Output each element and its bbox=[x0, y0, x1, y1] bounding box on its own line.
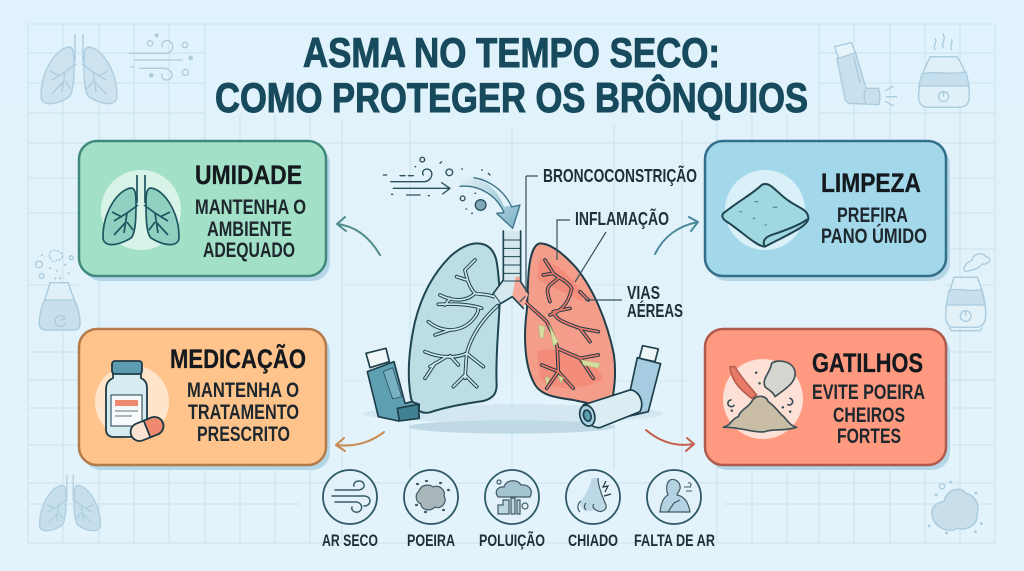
icon: faint wind top left bbox=[130, 34, 192, 80]
text: mantenha o ambiente adequado: AMBIENTE bbox=[207, 218, 292, 241]
inhalation arrow bbox=[460, 177, 520, 228]
text: mantenha o ambiente adequado: ADEQUADO bbox=[203, 239, 295, 262]
label: POLUIÇÃO bbox=[479, 530, 545, 550]
arrow: to limpeza bbox=[655, 217, 698, 254]
symptom: falta de ar bbox=[634, 470, 715, 550]
icon: dust and smoke bbox=[723, 361, 797, 432]
text: mantenha o tratamento prescrito: TRATAMENTO bbox=[188, 401, 299, 424]
inhaler left bbox=[366, 348, 419, 421]
icon: faint humidifier right bbox=[946, 254, 990, 331]
icon: cloud and city bbox=[496, 480, 531, 514]
panel: gatilhos bbox=[705, 329, 950, 470]
text: mantenha o tratamento prescrito bbox=[187, 379, 299, 446]
arrow: to gatilhos bbox=[646, 430, 694, 451]
heading: umidade: UMIDADE bbox=[195, 160, 302, 190]
trachea bbox=[493, 231, 528, 308]
central lungs illustration bbox=[363, 157, 663, 434]
icon: faint dust and flask left bbox=[36, 250, 80, 330]
inflamed patches bbox=[537, 258, 603, 388]
icon: wind bbox=[332, 481, 370, 512]
arrow: to medicação bbox=[336, 432, 384, 451]
title: ASMA NO TEMPO SECO: bbox=[303, 29, 720, 76]
left bronchial tree bbox=[425, 260, 498, 387]
label: inflamação bbox=[557, 208, 669, 282]
icon: faint dust cloud bottom right bbox=[929, 482, 982, 533]
panel: umidade bbox=[79, 141, 330, 281]
label: vias aéreas bbox=[585, 283, 683, 321]
right lung bbox=[525, 243, 615, 408]
text: prefira pano úmido: PANO ÚMIDO bbox=[821, 224, 927, 248]
wind lines bbox=[383, 157, 490, 213]
symptom: poeira bbox=[404, 470, 458, 550]
heading: limpeza: LIMPEZA bbox=[821, 168, 921, 198]
mucus bbox=[538, 325, 600, 385]
heading: gatilhos: GATILHOS bbox=[812, 348, 923, 378]
text: mantenha o ambiente adequado bbox=[195, 196, 306, 262]
icon: nose bbox=[578, 478, 611, 512]
text: evite poeira cheiros fortes bbox=[812, 381, 925, 448]
text: mantenha o tratamento prescrito: MANTENHA O bbox=[187, 379, 299, 402]
icon: faint lungs top left bbox=[41, 34, 117, 104]
text: mantenha o ambiente adequado: MANTENHA O bbox=[195, 196, 306, 219]
right bronchial tree bbox=[523, 260, 598, 388]
arrow: to umidade bbox=[337, 217, 380, 255]
icon: capsule bbox=[128, 414, 166, 444]
label: broncoconstrição bbox=[526, 165, 697, 292]
icon: faint lungs bottom left bbox=[40, 475, 100, 531]
inhaler right bbox=[577, 346, 661, 428]
label: POEIRA bbox=[407, 531, 455, 550]
icon: faint humidifier top right bbox=[919, 33, 969, 107]
text: prefira pano úmido: PREFIRA bbox=[837, 204, 908, 227]
label: FALTA DE AR bbox=[634, 531, 715, 550]
label: broncoconstrição: BRONCOCONSTRIÇÃO bbox=[543, 165, 697, 186]
icon: cloth bbox=[722, 184, 808, 247]
panel: medicação bbox=[79, 329, 330, 470]
icon: medicine bottle bbox=[106, 361, 166, 444]
icon: faint inhaler top right bbox=[835, 43, 897, 106]
title bbox=[215, 29, 808, 121]
panel: limpeza bbox=[705, 141, 950, 281]
symptom: poluição bbox=[479, 470, 545, 550]
label: vias aéreas: VIAS bbox=[627, 283, 660, 303]
ground shadow bbox=[363, 404, 663, 434]
text: mantenha o tratamento prescrito: PRESCRITO bbox=[197, 423, 290, 446]
text: evite poeira cheiros fortes: CHEIROS bbox=[833, 404, 905, 427]
text: evite poeira cheiros fortes: EVITE POEIRA bbox=[812, 381, 925, 404]
label: CHIADO bbox=[568, 531, 618, 550]
symptom: ar seco bbox=[322, 470, 378, 550]
heading: medicação: MEDICAÇÃO bbox=[170, 343, 306, 374]
text: prefira pano úmido bbox=[821, 204, 927, 248]
label: vias aéreas: AÉREAS bbox=[627, 300, 683, 321]
text: evite poeira cheiros fortes: FORTES bbox=[837, 425, 901, 448]
icon: person bbox=[660, 479, 692, 512]
label: inflamação: INFLAMAÇÃO bbox=[575, 208, 669, 229]
symptom: chiado bbox=[566, 470, 620, 550]
left lung bbox=[409, 243, 500, 413]
label: AR SECO bbox=[322, 531, 378, 550]
title: COMO PROTEGER OS BRÔNQUIOS bbox=[215, 73, 808, 121]
icon: lungs bbox=[103, 175, 179, 245]
icon: dust bbox=[416, 481, 449, 512]
